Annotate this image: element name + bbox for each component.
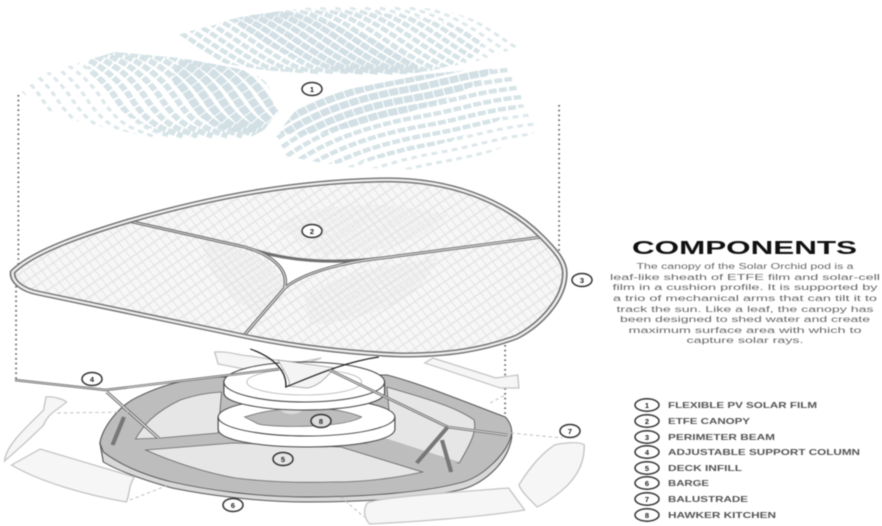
balustrade panels (5, 397, 584, 524)
lower disc (218, 398, 395, 447)
canopy panel: left (13, 221, 286, 336)
label 7: 7 (568, 427, 572, 436)
legend item 7: 7 (645, 495, 649, 504)
dense mesh: top (276, 205, 448, 255)
piston left (113, 417, 124, 445)
description text: capture solar rays. (686, 336, 804, 345)
balustrade left upper (5, 397, 67, 461)
dense mesh: left (201, 240, 285, 315)
legend item 4: 4 (645, 448, 650, 457)
adjustable support columns (15, 369, 507, 472)
deck infill: back left (135, 392, 222, 439)
legend item 1: FLEXIBLE PV SOLAR FILM (668, 400, 817, 410)
legend item 6: 6 (645, 479, 649, 488)
spars (129, 221, 542, 336)
film lobe: top (180, 6, 516, 75)
label 1: 1 (310, 85, 314, 94)
description text: film in a cushion profile. It is supported by (612, 283, 878, 292)
legend item 6: BARGE (668, 478, 709, 488)
label 3 (572, 274, 592, 286)
legend item 3 (635, 431, 775, 443)
label 8 (311, 414, 331, 428)
deck infill: back right (364, 387, 475, 463)
legend item 6 (635, 477, 709, 489)
legend item 2: 2 (645, 417, 649, 426)
deck infill: front (146, 443, 422, 482)
dense mesh: right (304, 258, 436, 325)
description text (610, 262, 880, 345)
exploded pod drawing (0, 8, 584, 524)
barge top ring (100, 375, 512, 497)
dashed connector lines (57, 395, 563, 517)
legend item 3: 3 (645, 433, 649, 442)
black canopy arms (250, 349, 379, 387)
description text: a trio of mechanical arms that can tilt it to (613, 294, 878, 303)
grey blob (280, 402, 303, 414)
legend item 8: HAWKER KITCHEN (668, 510, 776, 520)
hawker kitchen (218, 349, 395, 447)
legend item 2 (635, 415, 750, 427)
label 2 (302, 224, 322, 238)
description text: track the sun. Like a leaf, the canopy has (616, 305, 874, 314)
description text: The canopy of the Solar Orchid pod is a (636, 262, 854, 271)
central support (278, 360, 335, 388)
label 3: 3 (580, 276, 584, 285)
description text: been designed to shed water and create (620, 315, 871, 324)
label 1 (302, 82, 322, 96)
barge hull side (100, 375, 512, 502)
callout labels (82, 82, 592, 512)
legend item 8: 8 (645, 511, 649, 520)
legend item 4 (635, 446, 860, 458)
legend item 5: DECK INFILL (668, 463, 742, 473)
legend (635, 399, 860, 521)
legend item 5: 5 (645, 464, 649, 473)
label 2: 2 (310, 227, 314, 236)
strut left (107, 392, 158, 438)
legend item 5 (635, 462, 742, 474)
legend item 4: ADJUSTABLE SUPPORT COLUMN (668, 447, 860, 457)
legend item 7 (635, 493, 748, 505)
balustrade right (519, 443, 584, 507)
barge with ring deck (100, 375, 512, 502)
legend item 7: BALUSTRADE (668, 494, 748, 504)
legend item 1 (635, 399, 817, 411)
film lobe: right (276, 68, 534, 170)
label 8: 8 (319, 417, 323, 426)
label 5: 5 (281, 455, 285, 464)
beam right (329, 370, 507, 435)
canopy panel: top (129, 180, 542, 261)
flexible PV solar film (22, 6, 534, 170)
balustrade front (365, 488, 525, 524)
deck spoke (362, 436, 459, 468)
label 6 (223, 498, 243, 512)
perimeter beam (13, 180, 565, 355)
label 4 (82, 372, 102, 386)
description text: leaf-like sheath of ETFE film and solar-cell (610, 273, 880, 282)
legend item 2: ETFE CANOPY (668, 416, 750, 426)
label 6: 6 (231, 501, 235, 510)
ETFE canopy (13, 180, 565, 355)
description text: maximum surface area with which to (628, 326, 862, 335)
central hole (276, 257, 382, 288)
label 5 (273, 452, 293, 466)
label 7 (560, 424, 580, 438)
beam left (15, 369, 279, 390)
upper disc (224, 362, 385, 410)
legend item 1: 1 (645, 401, 649, 410)
piston right b (442, 440, 451, 472)
piston right a (417, 427, 448, 463)
balustrade left lower (11, 449, 134, 502)
back balustrade pieces (215, 352, 519, 388)
canopy panel: right (243, 237, 565, 355)
legend item 3: PERIMETER BEAM (668, 432, 775, 442)
film lobe: left (22, 52, 278, 138)
heading: COMPONENTS (632, 238, 857, 258)
dotted projection lines (16, 95, 559, 436)
label 4: 4 (90, 375, 95, 384)
legend item 8 (635, 509, 776, 521)
